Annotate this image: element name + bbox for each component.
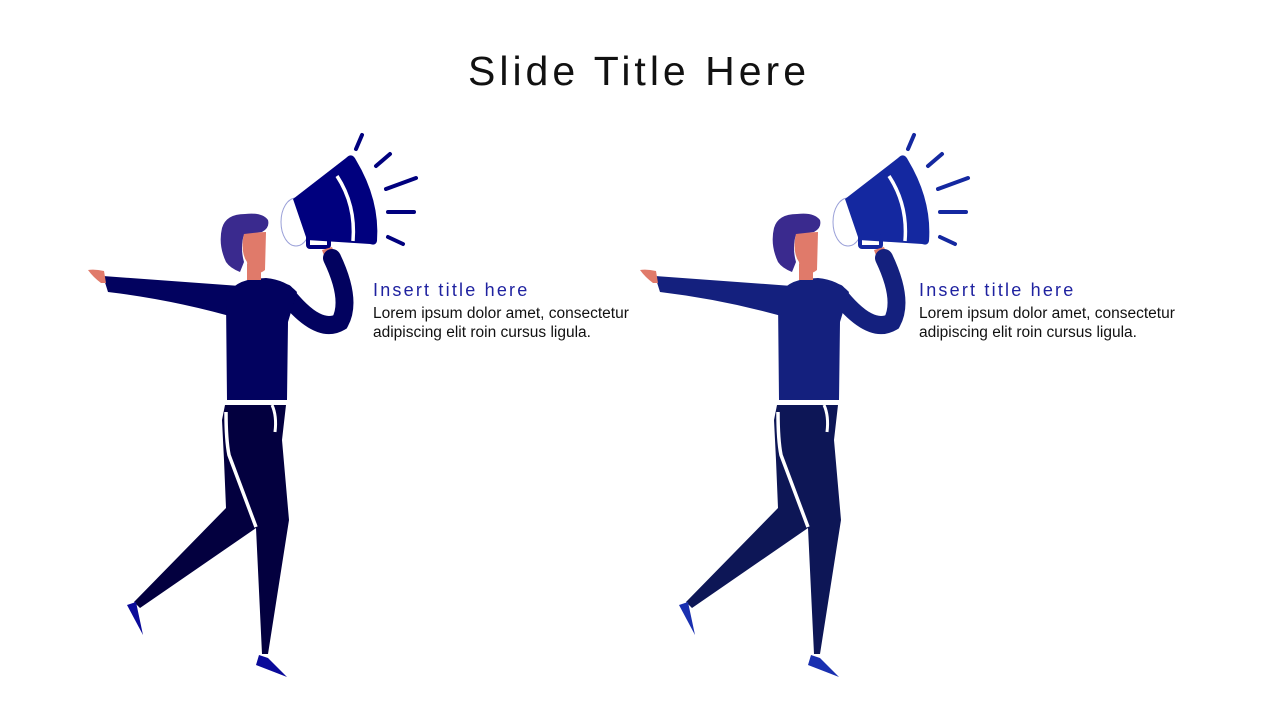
text block right: Lorem ipsum dolor amet, consectetur xyxy=(919,305,1175,322)
neck xyxy=(247,264,261,280)
torso xyxy=(778,278,849,400)
text block right xyxy=(919,280,1175,341)
left arm xyxy=(103,276,240,319)
neck xyxy=(799,264,813,280)
text block left: adipiscing elit roin cursus ligula. xyxy=(373,324,591,341)
hand right xyxy=(322,247,338,264)
hair xyxy=(221,214,268,272)
hair xyxy=(773,214,820,272)
right arm xyxy=(837,258,896,325)
icon: megaphone rays xyxy=(908,135,968,244)
hand left xyxy=(640,270,658,283)
icon: megaphone rays xyxy=(356,135,416,244)
face xyxy=(795,232,818,274)
pants xyxy=(686,405,841,654)
face xyxy=(243,232,266,274)
torso xyxy=(226,278,297,400)
text block right: Insert title here xyxy=(919,280,1075,300)
figure right xyxy=(640,135,968,677)
left arm xyxy=(655,276,792,319)
title: Slide Title Here xyxy=(468,48,810,94)
pants xyxy=(134,405,289,654)
shoes xyxy=(127,602,143,635)
hand right xyxy=(874,247,890,264)
text block left xyxy=(373,280,629,341)
figure left xyxy=(88,135,416,677)
right arm xyxy=(285,258,344,325)
shoes xyxy=(679,602,695,635)
text block left: Lorem ipsum dolor amet, consectetur xyxy=(373,305,629,322)
hand left xyxy=(88,270,106,283)
icon: megaphone xyxy=(281,155,377,247)
icon: megaphone xyxy=(833,155,929,247)
text block right: adipiscing elit roin cursus ligula. xyxy=(919,324,1137,341)
text block left: Insert title here xyxy=(373,280,529,300)
